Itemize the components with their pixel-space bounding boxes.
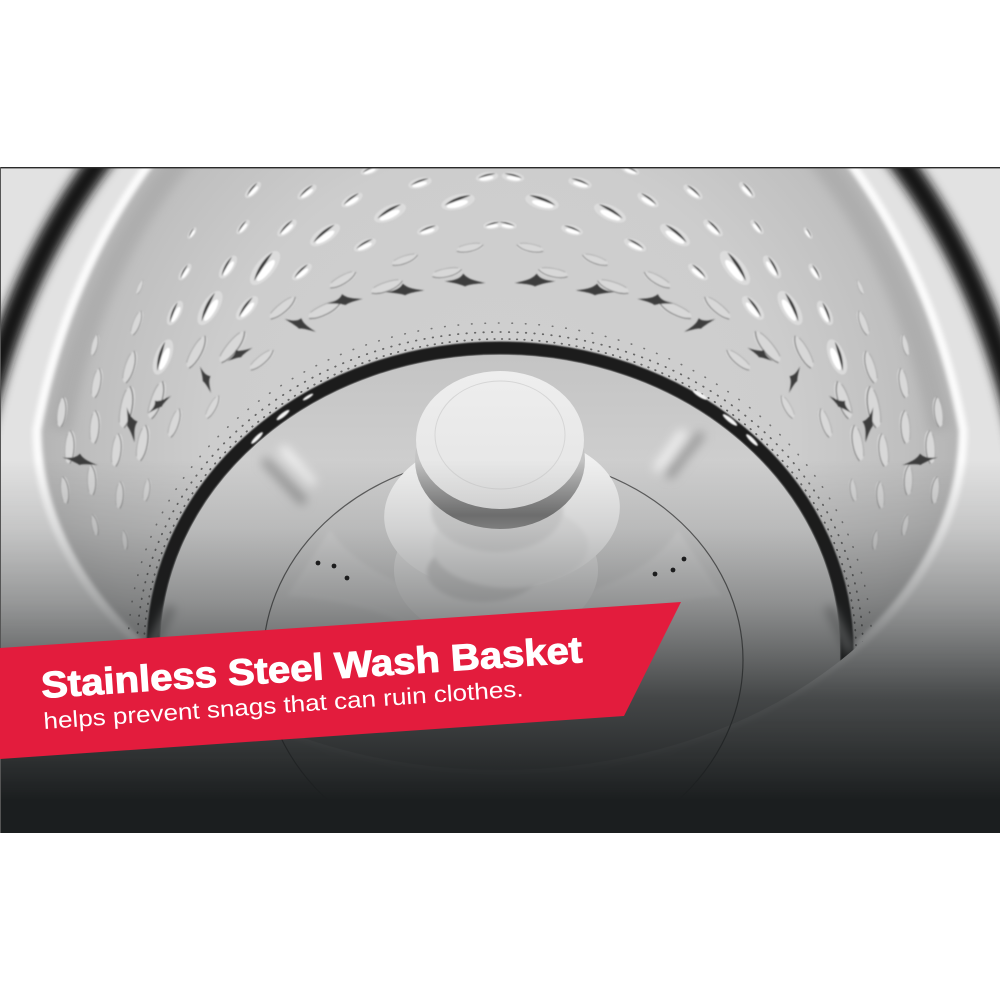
dark ring at basket floor	[146, 340, 854, 661]
frame edges	[0, 167, 1000, 833]
impeller	[265, 472, 744, 774]
agitator cap	[415, 371, 585, 529]
dark bottom gradient overlay	[0, 440, 1000, 833]
wash holes	[316, 557, 686, 580]
ring highlights	[250, 389, 759, 447]
banner heading: Stainless Steel Wash Basket	[40, 629, 583, 706]
basket floor plate	[147, 355, 856, 699]
banner subheading: helps prevent snags that can ruin clothes.	[43, 675, 524, 734]
central agitator post	[384, 371, 620, 618]
photo: washer interior	[0, 167, 1000, 833]
perforation rows around basket floor	[128, 322, 872, 646]
dimples on basket wall	[55, 163, 945, 550]
outer tub and rim	[1, 168, 1000, 680]
wash basket wall	[32, 168, 968, 670]
impeller vanes	[329, 540, 680, 543]
red banner	[0, 602, 681, 759]
plate fins	[150, 434, 850, 650]
infographic canvas	[0, 167, 1000, 833]
